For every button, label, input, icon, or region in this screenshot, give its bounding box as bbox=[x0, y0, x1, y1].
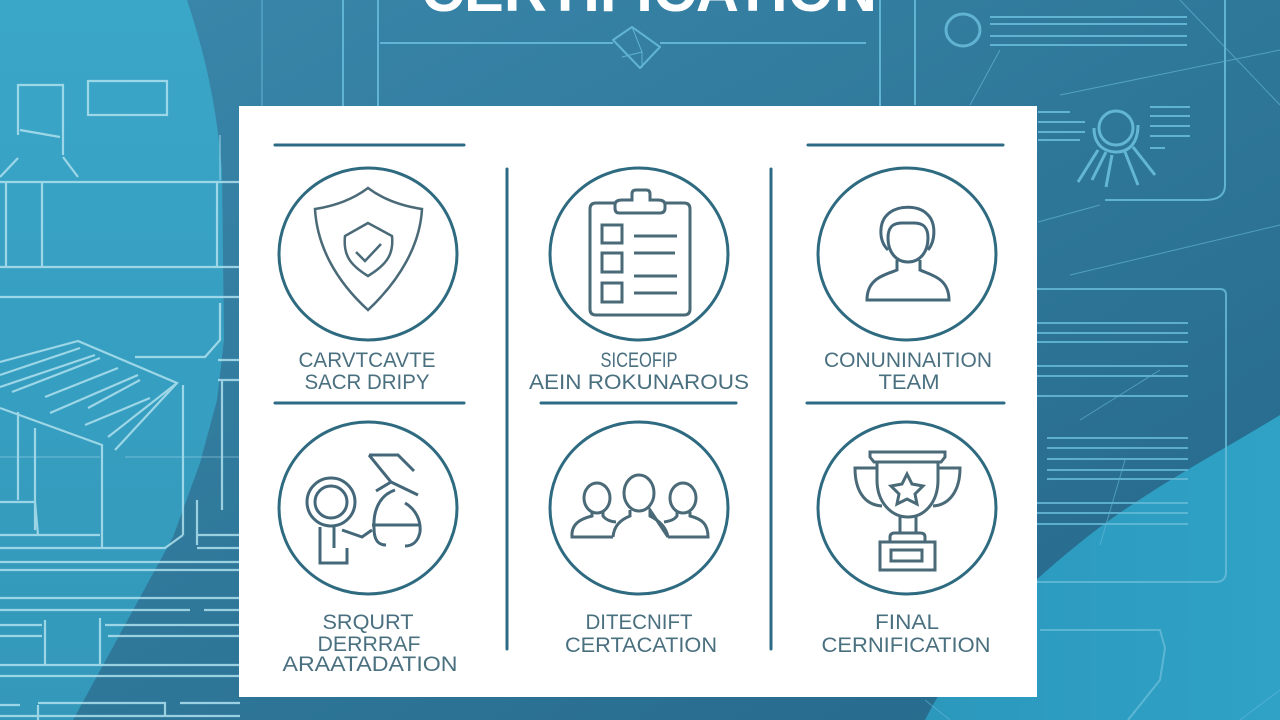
step 1 label bbox=[298, 349, 436, 394]
step 5 label: CERTACATION bbox=[565, 634, 717, 657]
step 2: clipboard icon bbox=[550, 168, 728, 340]
step 4 label: ARAATADATION bbox=[282, 653, 458, 676]
step 3 label: CONUNINAITION bbox=[824, 349, 992, 372]
step 6 label: FINAL bbox=[875, 611, 939, 634]
step 3: person icon bbox=[818, 168, 996, 340]
step 4 label: SRQURT bbox=[322, 611, 414, 634]
step 6: trophy icon bbox=[818, 422, 996, 594]
step 2 label: AEIN ROKUNAROUS bbox=[529, 371, 749, 394]
step 4: key and figure icon bbox=[279, 422, 457, 594]
step 6 label: CERNIFICATION bbox=[822, 634, 990, 657]
blueprint: ribbon seal bbox=[1078, 111, 1155, 187]
step 4 label bbox=[282, 611, 458, 676]
step 1: shield icon bbox=[279, 168, 457, 340]
step 3 label bbox=[824, 349, 992, 394]
step 2 label bbox=[529, 349, 749, 394]
blueprint: factory sketch on the left bbox=[0, 81, 240, 720]
divider lines bbox=[275, 145, 1004, 649]
step 5 label bbox=[565, 611, 717, 657]
step 5 label: DITECNIFT bbox=[586, 611, 693, 634]
step 1 label: SACR DRIPY bbox=[304, 371, 430, 394]
background: light left shape bbox=[0, 0, 224, 720]
blueprint: lower certificate frame bbox=[925, 289, 1280, 720]
background: light bottom-right shape bbox=[925, 415, 1280, 720]
step 6 label bbox=[822, 611, 990, 657]
step 1 label: CARVTCAVTE bbox=[298, 349, 436, 372]
step 4 label: DERRRAF bbox=[318, 633, 420, 656]
blueprint: certificate frames at top bbox=[262, 0, 1280, 275]
step 5: team icon bbox=[550, 422, 728, 594]
panel: white card bbox=[239, 106, 1037, 697]
step 2 label: SICEOFIP bbox=[600, 349, 678, 372]
step 3 label: TEAM bbox=[878, 371, 940, 394]
